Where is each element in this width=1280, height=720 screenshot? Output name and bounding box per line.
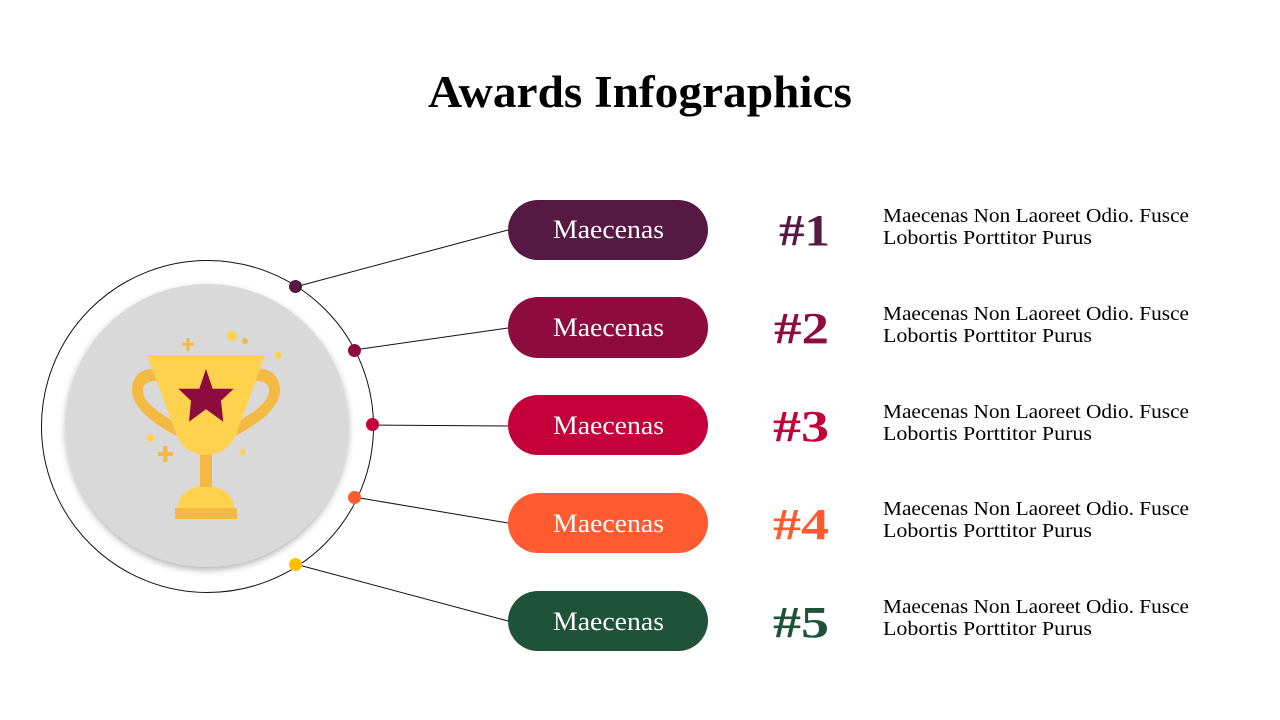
pill 1 xyxy=(508,200,708,260)
icon: trophy xyxy=(132,331,282,519)
row 5 xyxy=(508,591,1189,651)
connector dots xyxy=(289,280,379,571)
pill 2: Maecenas xyxy=(553,313,664,342)
description 4: Maecenas Non Laoreet Odio. Fusce xyxy=(883,498,1189,520)
pill 3 xyxy=(508,395,708,455)
description 1: Lobortis Porttitor Purus xyxy=(883,227,1092,249)
description 3 xyxy=(883,401,1189,445)
description 2: Maecenas Non Laoreet Odio. Fusce xyxy=(883,303,1189,325)
description 3: Maecenas Non Laoreet Odio. Fusce xyxy=(883,401,1189,423)
description 5: Lobortis Porttitor Purus xyxy=(883,618,1092,640)
rank 3: #3 xyxy=(773,402,829,451)
description 1: Maecenas Non Laoreet Odio. Fusce xyxy=(883,205,1189,227)
pill 3: Maecenas xyxy=(553,411,664,440)
pill 4 xyxy=(508,493,708,553)
pill 2 xyxy=(508,297,708,358)
description 2: Lobortis Porttitor Purus xyxy=(883,325,1092,347)
description 4 xyxy=(883,498,1189,542)
pill 5 xyxy=(508,591,708,651)
pill 5: Maecenas xyxy=(553,607,664,636)
description 3: Lobortis Porttitor Purus xyxy=(883,423,1092,445)
row 2 xyxy=(508,297,1189,358)
pill 1: Maecenas xyxy=(553,215,664,244)
description 5: Maecenas Non Laoreet Odio. Fusce xyxy=(883,596,1189,618)
description 5 xyxy=(883,596,1189,640)
icon: star xyxy=(178,369,234,422)
rank 1: #1 xyxy=(779,206,830,255)
rank 2: #2 xyxy=(774,304,829,353)
outer ring xyxy=(42,260,374,592)
description 2 xyxy=(883,303,1189,347)
rank 4: #4 xyxy=(773,500,829,549)
row 4 xyxy=(508,493,1189,553)
connector lines xyxy=(295,230,508,621)
row 3 xyxy=(508,395,1189,455)
pill 4: Maecenas xyxy=(553,509,664,538)
rank 5: #5 xyxy=(773,598,829,647)
icon: sparkles xyxy=(147,331,282,462)
title: Awards Infographics xyxy=(428,67,852,117)
gray disc xyxy=(66,284,348,567)
description 4: Lobortis Porttitor Purus xyxy=(883,520,1092,542)
row 1 xyxy=(508,200,1189,260)
description 1 xyxy=(883,205,1189,249)
